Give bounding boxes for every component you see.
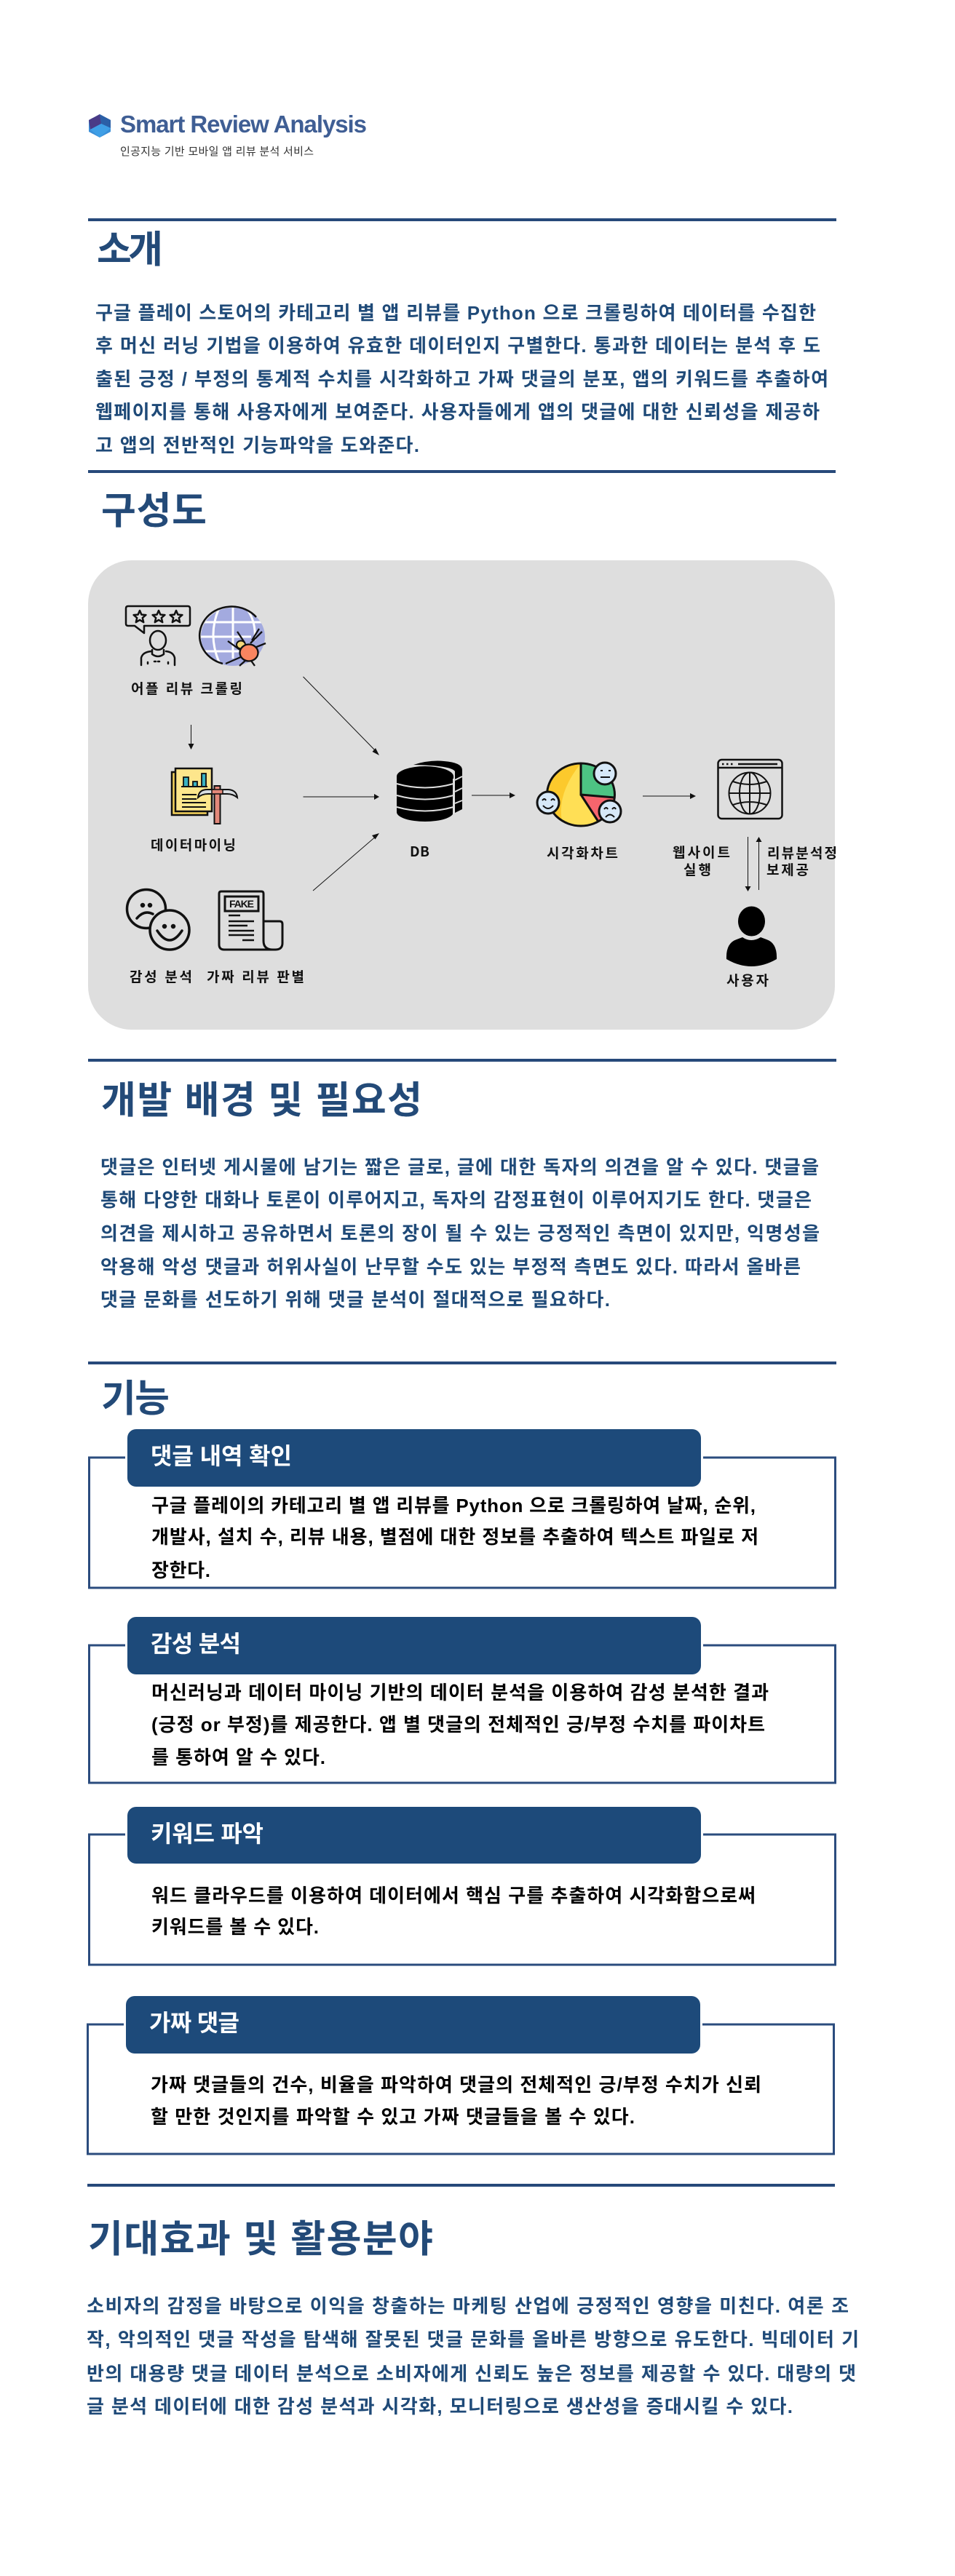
icon: fake news paper: FAKE (229, 898, 254, 910)
text block: background: 통해 다양한 대화나 토론이 이루어지고, 독자의 감정표현이 이루어지기도 한다. 댓글은 (100, 1189, 812, 1211)
label: run website: 웹사이트 (673, 842, 730, 862)
arrows: website and user (745, 837, 761, 891)
panel: keyword identification (89, 1807, 836, 1965)
text block: expected effects: 작, 악의적인 댓글 작성을 탐색해 잘못된 댓글 문화를 올바른 방향으로 유도한다. 빅데이터 기 (87, 2329, 859, 2350)
text block: background (100, 1156, 820, 1311)
label: app review crawling: 어플 리뷰 크롤링 (131, 678, 242, 698)
text block: expected effects: 소비자의 감정을 바탕으로 이익을 창출하는 마케팅 산업에 긍정적인 영향을 미친다. 여론 조 (87, 2295, 849, 2317)
text block: expected effects: 글 분석 데이터에 대한 감성 분석과 시각화, 모니터링으로 생산성을 증대시킬 수 있다. (87, 2396, 793, 2417)
panel: fake comments: 가짜 댓글 (149, 2010, 239, 2036)
panel: sentiment analysis: 를 통하여 알 수 있다. (151, 1746, 325, 1768)
subtitle: 인공지능 기반 모바일 앱 리뷰 분석 서비스 (120, 146, 314, 158)
text block: background: 댓글 문화를 선도하기 위해 댓글 분석이 절대적으로 필요하다. (100, 1289, 610, 1311)
panel: sentiment analysis: 머신러닝과 데이터 마이닝 기반의 데이터 분석을 이용하여 감성 분석한 결과 (151, 1682, 769, 1704)
text block: intro (95, 302, 828, 456)
icon: user silhouette (726, 907, 777, 966)
label: visualization chart: 시각화차트 (547, 843, 618, 862)
text block: intro: 구글 플레이 스토어의 카테고리 별 앱 리뷰를 Python 으로 크롤링하여 데이터를 수집한 (95, 302, 816, 324)
text block: intro: 웹페이지를 통해 사용자에게 보여준다. 사용자들에게 앱의 댓글에 대한 신뢰성을 제공하 (95, 401, 820, 423)
heading: intro: 소개 (97, 229, 163, 271)
panel: comment history: 개발사, 설치 수, 리뷰 내용, 별점에 대한 정보를 추출하여 텍스트 파일로 저 (151, 1526, 758, 1548)
label: run website: 실행 (683, 859, 711, 879)
panel: keyword identification: 워드 클라우드를 이용하여 데이터에서 핵심 구를 추출하여 시각화함으로써 (151, 1885, 756, 1907)
panel: comment history: 장한다. (151, 1559, 210, 1581)
panel: comment history: 댓글 내역 확인 (151, 1443, 292, 1469)
header: logo and service title (89, 111, 367, 158)
panel: comment history: 구글 플레이의 카테고리 별 앱 리뷰를 Python 으로 크롤링하여 날짜, 순위, (151, 1495, 756, 1516)
panel: comment history (89, 1429, 836, 1588)
title: Smart Review Analysis: Smart Review Analysis (120, 111, 367, 138)
text block: background: 의견을 제시하고 공유하면서 토론의 장이 될 수 있는 긍정적인 측면이 있지만, 익명성을 (100, 1223, 820, 1244)
heading: features: 기능 (101, 1378, 170, 1420)
panel: keyword identification: 키워드 파악 (151, 1821, 263, 1847)
arrow: crawling to mining (188, 725, 194, 750)
heading: expected effects: 기대효과 및 활용분야 (88, 2219, 433, 2261)
panel: architecture diagram (88, 560, 837, 1030)
text block: expected effects: 반의 대용량 댓글 데이터 분석으로 소비자에게 신뢰도 높은 정보를 제공할 수 있다. 대량의 댓 (87, 2363, 856, 2385)
icon: database (397, 761, 462, 822)
panel: fake comments: 가짜 댓글들의 건수, 비율을 파악하여 댓글의 전체적인 긍/부정 수치가 신뢰 (151, 2074, 761, 2096)
text block: expected effects (87, 2295, 859, 2417)
icon: browser with globe (718, 760, 782, 819)
icon: review person with stars (126, 606, 190, 665)
label: fake review detection: 가짜 리뷰 판별 (207, 966, 304, 986)
arrow: DB to chart (472, 792, 515, 798)
label: review analysis info provided (766, 843, 837, 879)
arrow: chart to website (643, 793, 696, 799)
label: review analysis info provided: 리뷰분석정 (767, 843, 837, 862)
icon: fake news paper (219, 891, 282, 950)
icon: data mining document and pickaxe (172, 768, 237, 824)
label: run website (673, 842, 730, 879)
text block: background: 댓글은 인터넷 게시물에 남기는 짧은 글로, 글에 대한 독자의 의견을 알 수 있다. 댓글을 (100, 1156, 819, 1178)
infographic canvas (87, 114, 857, 2416)
heading: architecture: 구성도 (101, 490, 207, 533)
panel: sentiment analysis: 감성 분석 (151, 1631, 241, 1657)
text block: intro: 후 머신 러닝 기법을 이용하여 유효한 데이터인지 구별한다. 통과한 데이터는 분석 후 도 (95, 335, 820, 357)
text block: intro: 고 앱의 전반적인 기능파악을 도와준다. (95, 434, 419, 456)
panel: fake comments (87, 1996, 834, 2154)
icon: web crawling globe with spider (199, 607, 266, 666)
label: user: 사용자 (726, 970, 769, 990)
text block: background: 악용해 악성 댓글과 허위사실이 난무할 수도 있는 부정적 측면도 있다. 따라서 올바른 (100, 1256, 801, 1278)
icon: hexagon logo (89, 114, 111, 138)
panel: sentiment analysis (89, 1617, 836, 1783)
panel: keyword identification: 키워드를 볼 수 있다. (151, 1916, 319, 1938)
label: sentiment analysis: 감성 분석 (130, 966, 192, 986)
label: review analysis info provided: 보제공 (766, 859, 809, 879)
panel: sentiment analysis: (긍정 or 부정)를 제공한다. 앱 별 댓글의 전체적인 긍/부정 수치를 파이차트 (151, 1714, 765, 1736)
icon: sentiment pie chart (537, 763, 621, 826)
heading: background and need: 개발 배경 및 필요성 (101, 1080, 422, 1122)
icon: sentiment faces (127, 889, 189, 950)
label: data mining: 데이터마이닝 (151, 835, 236, 854)
panel: fake comments: 할 만한 것인지를 파악할 수 있고 가짜 댓글들을 볼 수 있다. (151, 2106, 635, 2128)
text block: intro: 출된 긍정 / 부정의 통계적 수치를 시각화하고 가짜 댓글의 분포, 앱의 키워드를 추출하여 (95, 368, 828, 390)
arrows: sources to DB (303, 677, 379, 891)
label: DB: DB (410, 841, 429, 861)
